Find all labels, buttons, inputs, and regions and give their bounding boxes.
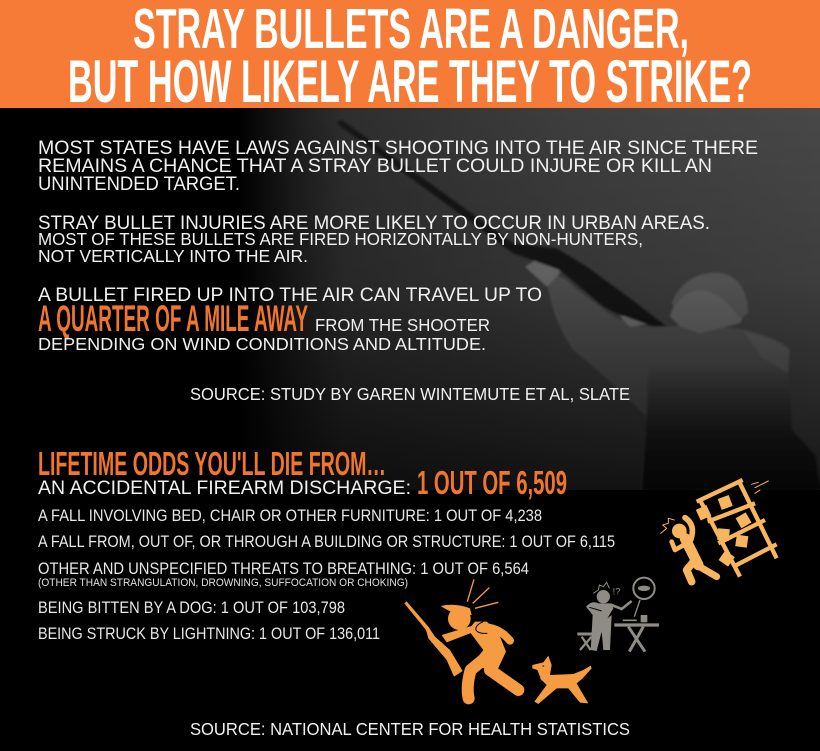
odds: lightning: BEING STRUCK BY LIGHTNING: 1 OUT OF 136,011 xyxy=(38,625,380,643)
icon: choking person at table xyxy=(577,578,659,652)
odds: building fall: A FALL FROM, OUT OF, OR THROUGH A BUILDING OR STRUCTURE: 1 OUT OF 6,115 xyxy=(38,533,615,551)
odds: threats to breathing xyxy=(38,560,529,589)
odds: accidental firearm discharge xyxy=(38,464,567,501)
text block: quarter of a mile: DEPENDING ON WIND CONDITIONS AND ALTITUDE. xyxy=(38,334,486,354)
icon: choking person at table: !? xyxy=(613,586,620,596)
text block: urban injuries xyxy=(38,212,710,266)
list of lifetime odds xyxy=(38,464,615,643)
text block: laws against shooting into the air: UNINTENDED TARGET. xyxy=(38,173,240,195)
text block: quarter of a mile: FROM THE SHOOTER xyxy=(315,315,490,335)
odds: accidental firearm discharge: AN ACCIDENTAL FIREARM DISCHARGE: xyxy=(38,477,411,499)
text block: quarter of a mile: A QUARTER OF A MILE AWAY xyxy=(38,298,308,339)
background photo: hunter aiming a shotgun xyxy=(254,108,820,490)
source: National Center for Health Statistics: SOURCE: NATIONAL CENTER FOR HEALTH STATISTICS xyxy=(190,719,630,739)
text block: laws against shooting into the air: MOST STATES HAVE LAWS AGAINST SHOOTING INTO THE AIR SINCE THERE xyxy=(38,137,758,159)
icon: falling shelf and person xyxy=(661,480,777,582)
odds: threats to breathing: OTHER AND UNSPECIFIED THREATS TO BREATHING: 1 OUT OF 6,564 xyxy=(38,560,529,578)
source: Wintemute study: SOURCE: STUDY BY GAREN WINTEMUTE ET AL, SLATE xyxy=(190,384,630,404)
text block: urban injuries: MOST OF THESE BULLETS ARE FIRED HORIZONTALLY BY NON-HUNTERS, xyxy=(38,229,643,249)
odds: threats to breathing: (OTHER THAN STRANGULATION, DROWNING, SUFFOCATION OR CHOKING) xyxy=(38,577,408,589)
text block: urban injuries: NOT VERTICALLY INTO THE AIR. xyxy=(38,246,308,266)
text block: urban injuries: STRAY BULLET INJURIES ARE MORE LIKELY TO OCCUR IN URBAN AREAS. xyxy=(38,212,710,234)
icon: dog xyxy=(532,656,592,704)
text block: quarter of a mile: A BULLET FIRED UP INTO THE AIR CAN TRAVEL UP TO xyxy=(38,284,542,306)
text block: quarter of a mile xyxy=(38,284,542,354)
text block: laws against shooting into the air xyxy=(38,137,758,195)
icon: hunter startled with rifle xyxy=(404,579,518,698)
odds: accidental firearm discharge: 1 OUT OF 6,509 xyxy=(417,464,567,501)
heading: lifetime odds: LIFETIME ODDS YOU'LL DIE FROM… xyxy=(38,445,386,482)
header banner xyxy=(0,0,820,115)
text block: laws against shooting into the air: REMAINS A CHANCE THAT A STRAY BULLET COULD INJURE OR KILL AN xyxy=(38,155,712,177)
odds: furniture fall: A FALL INVOLVING BED, CHAIR OR OTHER FURNITURE: 1 OUT OF 4,238 xyxy=(38,507,542,525)
odds: dog bite: BEING BITTEN BY A DOG: 1 OUT OF 103,798 xyxy=(38,599,345,617)
title xyxy=(68,0,752,115)
